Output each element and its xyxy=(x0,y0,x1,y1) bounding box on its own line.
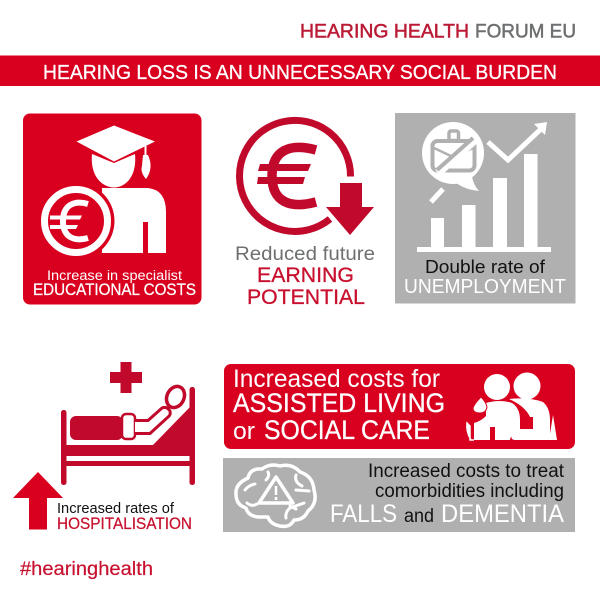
caption: comorbidities: DEMENTIA xyxy=(441,500,564,528)
caption: hospitalisation: Increased rates of xyxy=(57,500,175,517)
panel: unemployment xyxy=(395,113,576,304)
hashtag: #hearinghealth xyxy=(20,559,153,580)
panel: hospitalisation xyxy=(13,362,195,533)
logo: Hearing Health Forum EU: FORUM EU xyxy=(475,20,576,42)
caption: assisted living: ASSISTED LIVING xyxy=(233,388,445,418)
logo: Hearing Health Forum EU: HEARING HEALTH xyxy=(300,20,469,42)
icon: medical cross xyxy=(110,362,142,393)
caption: comorbidities xyxy=(330,461,565,528)
panel: assisted living xyxy=(224,364,575,449)
caption: unemployment: UNEMPLOYMENT xyxy=(404,276,566,298)
caption: earning potential xyxy=(235,244,375,309)
caption: unemployment: Double rate of xyxy=(425,257,546,277)
caption: unemployment xyxy=(404,257,566,298)
caption: assisted living xyxy=(233,365,445,445)
caption: hospitalisation xyxy=(57,500,192,533)
caption: comorbidities: Increased costs to treat xyxy=(368,461,565,482)
title banner: HEARING LOSS IS AN UNNECESSARY SOCIAL BURDEN xyxy=(43,61,557,84)
icon: brain with warning triangle xyxy=(236,465,315,526)
icon: graduate with euro coin xyxy=(38,126,166,260)
title banner xyxy=(0,56,600,86)
icon: bar chart with rising arrow xyxy=(417,122,551,252)
caption: earning potential: EARNING xyxy=(257,264,354,287)
caption: earning potential: Reduced future xyxy=(235,244,375,265)
panel: educational costs xyxy=(23,114,202,304)
caption: educational costs: EDUCATIONAL COSTS xyxy=(33,281,196,299)
caption: assisted living: SOCIAL CARE xyxy=(264,415,430,445)
icon: carer with elderly person xyxy=(467,372,557,440)
caption: comorbidities: comorbidities including xyxy=(375,481,564,502)
logo: Hearing Health Forum EU xyxy=(300,20,576,42)
caption: assisted living: Increased costs for xyxy=(233,365,440,393)
icon: patient in bed xyxy=(61,383,195,485)
caption: comorbidities: and xyxy=(404,506,434,527)
icon: euro with falling arrow xyxy=(240,120,374,235)
icon: up arrow xyxy=(13,472,63,530)
caption: assisted living: or xyxy=(233,418,255,445)
caption: comorbidities: FALLS xyxy=(330,500,397,528)
icon: magnifier with crossed briefcase xyxy=(422,122,484,202)
caption: earning potential: POTENTIAL xyxy=(247,286,365,309)
caption: educational costs xyxy=(33,268,196,299)
panel: falls and dementia xyxy=(223,458,575,532)
caption: hospitalisation: HOSPITALISATION xyxy=(57,515,192,533)
panel: earning potential xyxy=(235,120,375,309)
caption: educational costs: Increase in specialist xyxy=(47,268,182,283)
